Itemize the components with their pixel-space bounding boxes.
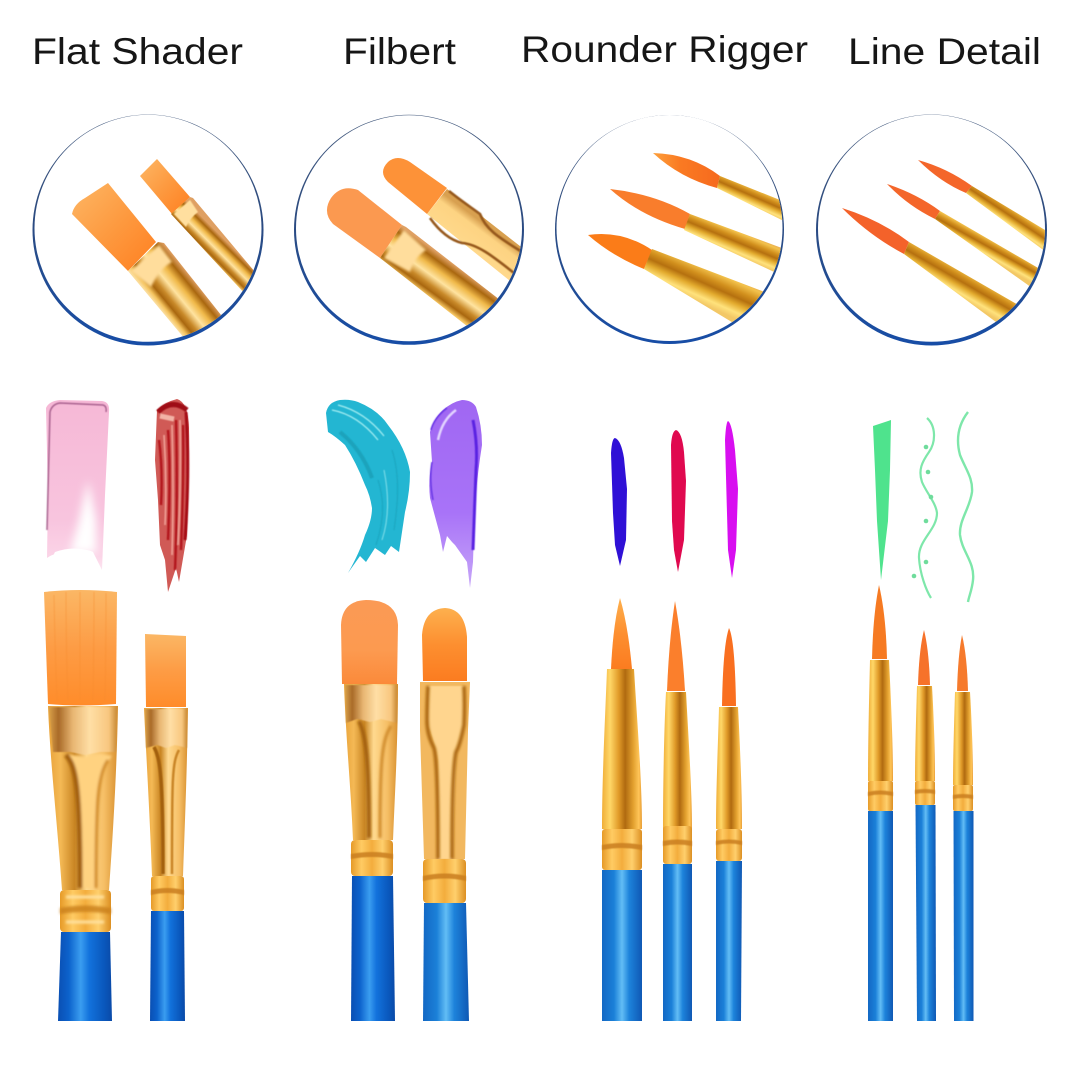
bristles (611, 598, 632, 669)
brush: small flat shader (144, 634, 188, 1021)
bottom round brush close-up (588, 234, 763, 322)
brush: line detail large (868, 585, 893, 1021)
bristles (872, 585, 887, 659)
collar (915, 781, 935, 805)
brush: small filbert (420, 608, 470, 1021)
title: Flat Shader: Flat Shader (32, 31, 243, 72)
paint swatch: cyan filbert stroke (326, 400, 410, 573)
brush: rounder rigger medium (663, 601, 692, 1021)
collar (602, 829, 642, 870)
collar (351, 840, 393, 876)
bottom detail brush close-up (842, 208, 1020, 325)
collar (953, 785, 973, 811)
paint swatch: pink flat stroke (46, 400, 109, 570)
ferrule (915, 686, 935, 781)
bristles (422, 608, 467, 681)
small flat brush close-up (140, 159, 260, 295)
brush: line detail medium (915, 630, 936, 1021)
bristles (667, 601, 685, 691)
collar (60, 890, 111, 932)
paint swatch: green wavy line with dots (912, 418, 937, 598)
handle (602, 870, 642, 1021)
middle detail brush close-up (887, 184, 1045, 290)
circle: filbert close-up (294, 115, 525, 345)
small filbert brush close-up (383, 158, 525, 285)
paint swatch: green wavy line (958, 412, 973, 602)
paint swatch: blue round stroke (611, 438, 627, 566)
handle (58, 932, 112, 1021)
paint swatch: red flat stroke (155, 399, 189, 592)
brush: large filbert (341, 600, 398, 1021)
ferrule (344, 684, 398, 840)
handle (663, 864, 692, 1021)
ferrule (953, 692, 973, 785)
ferrule (868, 660, 893, 781)
bristles (44, 590, 117, 706)
large flat brush close-up (72, 183, 225, 345)
title: Rounder Rigger: Rounder Rigger (521, 29, 808, 70)
top round brush close-up (653, 153, 782, 220)
ferrule (716, 707, 742, 829)
bristles (918, 630, 930, 685)
brush: rounder rigger large (602, 598, 642, 1021)
circle: round rigger close-up (555, 115, 792, 344)
ferrule (602, 669, 642, 829)
large filbert brush close-up (327, 188, 500, 330)
handle (351, 876, 395, 1021)
handle (954, 811, 974, 1021)
brush: rounder rigger small (716, 628, 742, 1021)
collar (151, 876, 184, 911)
handle (150, 911, 185, 1021)
top detail brush close-up (918, 160, 1045, 250)
bristles (341, 600, 398, 684)
title: Filbert: Filbert (343, 31, 457, 72)
collar (716, 829, 742, 861)
handle (916, 805, 936, 1021)
middle round brush close-up (610, 189, 781, 272)
circle: line detail close-up (816, 114, 1055, 346)
handle (423, 903, 469, 1021)
ferrule (663, 692, 692, 829)
bristles (957, 635, 968, 691)
bristles (722, 628, 736, 706)
handle (868, 811, 893, 1021)
collar (423, 859, 466, 903)
brush: line detail small (953, 635, 974, 1021)
paint swatch: purple filbert stroke (429, 400, 482, 588)
ferrule (144, 708, 188, 876)
collar (663, 826, 692, 864)
paint swatch: crimson round stroke (671, 430, 686, 572)
title: Line Detail: Line Detail (848, 31, 1041, 72)
paint swatch: green line stroke (873, 420, 891, 580)
paint swatch: magenta round stroke (725, 421, 738, 578)
ferrule (48, 706, 118, 890)
brush: large flat shader (44, 590, 118, 1021)
ferrule (420, 682, 470, 859)
circle: flat shader close-up (32, 114, 264, 346)
handle (716, 861, 742, 1021)
bristles (145, 634, 186, 707)
collar (868, 781, 893, 811)
